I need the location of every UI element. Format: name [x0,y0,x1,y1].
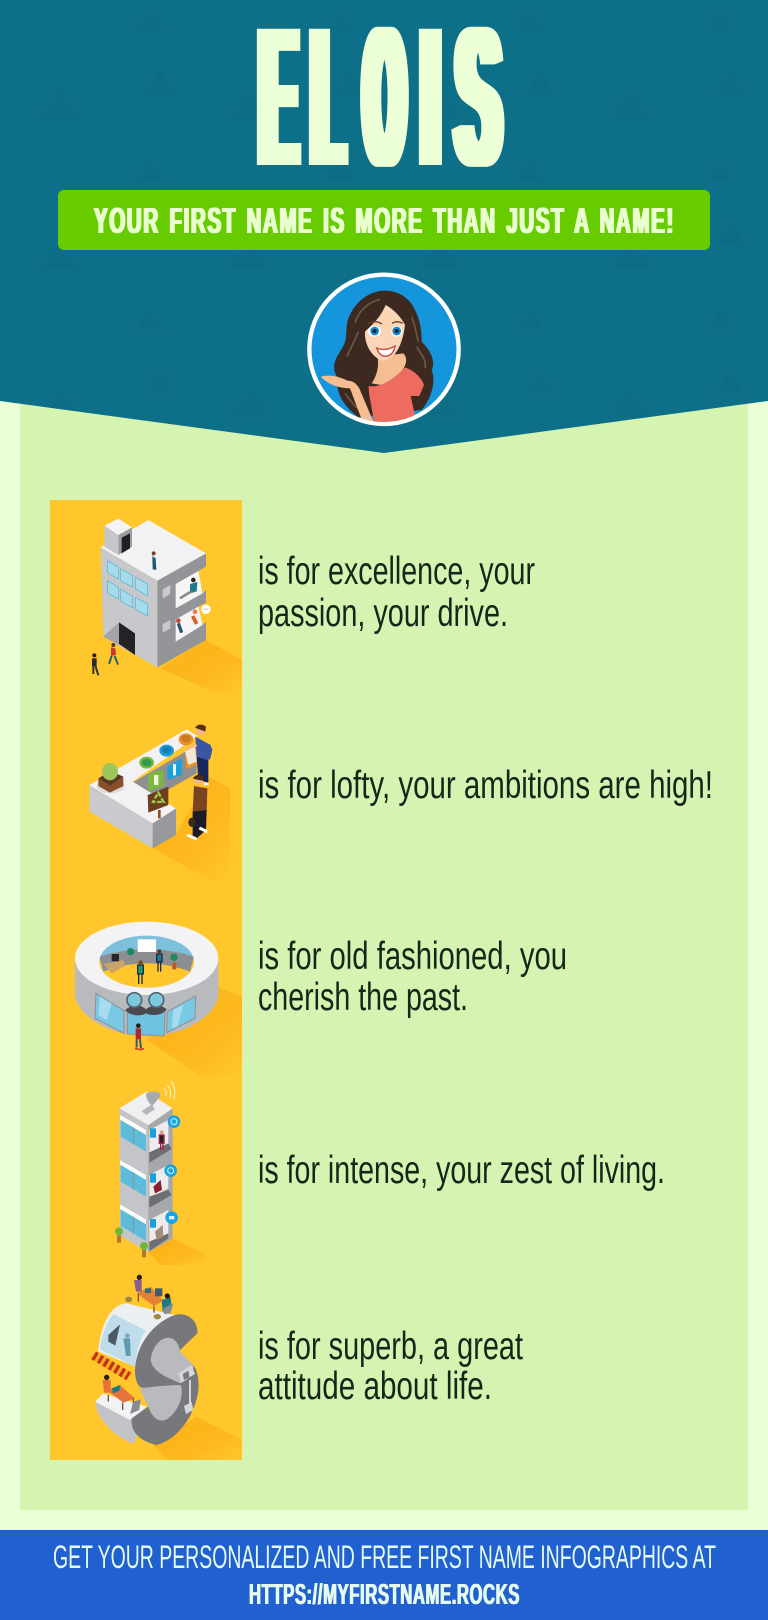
neck [372,353,406,386]
floor 3 [120,1204,178,1251]
lower deck [95,1375,147,1444]
letter S shape [132,1314,199,1445]
text: S: is for superb, a great [258,1325,523,1368]
glass floor [98,1303,180,1370]
illustration: S-shaped office for S [89,1275,242,1460]
balconies [163,567,211,642]
avatar: woman portrait [309,275,459,424]
roof box [104,519,132,555]
arm and hand [321,376,373,422]
door [119,622,135,655]
illustration: office building for E [92,519,242,693]
glasses and moustache sign [125,993,167,1015]
hair [334,291,433,417]
text: O line 2: cherish the past. [258,976,468,1019]
floor 2 [120,1160,177,1208]
awning [89,1353,133,1379]
eyes [367,322,403,337]
satellite dish [142,1081,175,1115]
shop interior [99,939,194,990]
bins [139,733,197,792]
face [365,305,405,361]
sign [148,787,168,818]
man in brown [186,775,207,841]
text: S line 2: attitude about life. [258,1365,492,1408]
man in blue [185,724,211,785]
bracket device [178,1365,195,1414]
smile [377,346,395,356]
windows [108,561,148,616]
footer [0,1530,768,1620]
floor 1 [120,1115,180,1163]
rooftop desk team [125,1275,173,1319]
plants [115,1227,148,1257]
hair highlights [345,299,425,410]
tagline banner [58,190,710,250]
shirt [369,367,424,423]
text: E line 2: passion, your drive. [258,592,508,635]
glass front [95,993,196,1036]
footer: HTTPS://MYFIRSTNAME.ROCKS [249,1579,520,1611]
text: E: is for excellence, your [258,550,535,593]
panel: content [20,395,748,1510]
panel: letter illustrations column [50,500,242,1460]
customer [135,1023,144,1050]
title [260,0,500,208]
text: O: is for old fashioned, you [258,935,567,978]
illustration: round optician shop for O [75,922,242,1075]
people [92,551,156,675]
illustration: recycling counter for L [89,724,230,880]
plant box [97,763,125,793]
header banner with chevron [0,0,768,453]
illustration: tower with communications for I [115,1081,207,1265]
